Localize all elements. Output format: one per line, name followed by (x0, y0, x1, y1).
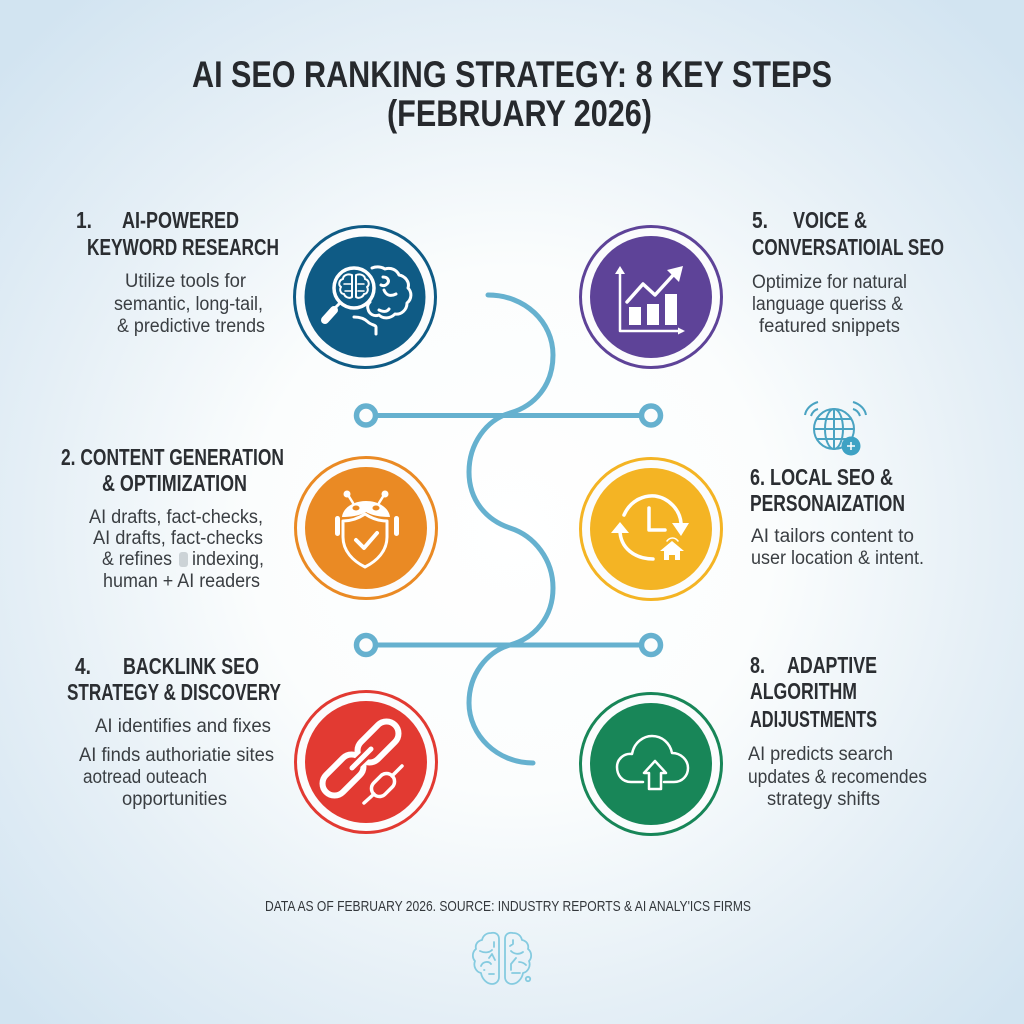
icon: footer brain (473, 933, 531, 984)
title (192, 54, 832, 134)
icon: rising bar chart (580, 226, 722, 368)
panel: step 4 text: AI identifies and fixes (95, 716, 271, 737)
panel: step 2 text: indexing, (192, 549, 264, 570)
panel: step 2 text: & refines (102, 549, 172, 570)
panel: step 2 text: 2. CONTENT GENERATION (61, 444, 284, 470)
panel: step 5 text: 5. (752, 207, 768, 233)
panel: step 8 text: ADAPTIVE (787, 652, 877, 678)
panel: step 5 text: language queriss & (752, 294, 903, 315)
panel: step 5 text (752, 207, 944, 337)
panel: step 1 text: & predictive trends (117, 316, 265, 337)
panel: step 2 text: AI drafts, fact-checks, (89, 507, 263, 528)
panel: step 5 text: Optimize for natural (752, 272, 907, 293)
title: AI SEO RANKING STRATEGY: 8 KEY STEPS (192, 54, 832, 95)
panel: step 4 text: aotread outeach (83, 767, 207, 788)
panel: step 1 text: semantic, long-tail, (114, 294, 263, 315)
panel: step 4 text: 4. (75, 653, 91, 679)
panel: step 6 text: PERSONAIZATION (750, 490, 905, 516)
panel: step 8 text: 8. (750, 652, 765, 678)
connector: winding line with nodes (356, 295, 660, 763)
panel: step 1 text: KEYWORD RESEARCH (87, 234, 279, 260)
panel: step 2 text: AI drafts, fact-checks (93, 528, 263, 549)
panel: step 5 text: featured snippets (759, 316, 900, 337)
icon: clock with cycle arrows (580, 458, 722, 600)
panel: step 2 text: & OPTIMIZATION (102, 470, 247, 496)
icon: brain under magnifier (294, 226, 436, 368)
panel: step 4 text: opportunities (122, 789, 227, 810)
panel: step 2 text: human + AI readers (103, 571, 260, 592)
panel: step 8 text: AI predicts search (748, 744, 893, 765)
panel: step 8 text: strategy shifts (767, 789, 880, 810)
panel: step 1 text (76, 207, 279, 337)
panel: step 4 text: STRATEGY & DISCOVERY (67, 679, 281, 705)
panel: step 1 text: Utilize tools for (125, 271, 247, 292)
panel: step 8 text: ADIJUSTMENTS (750, 706, 877, 732)
panel: step 6 text: AI tailors content to (751, 526, 914, 547)
icon: globe with signal (805, 402, 866, 456)
icon: broken chain links (296, 692, 436, 832)
panel: step 6 text: user location & intent. (751, 548, 924, 569)
panel: step 6 text (750, 464, 924, 569)
panel: step 8 text (748, 652, 927, 810)
icon: robot shield (296, 458, 436, 598)
panel: step 4 text (67, 653, 281, 810)
panel: step 6 text: 6. LOCAL SEO & (750, 464, 893, 490)
panel: step 1 text: 1. (76, 207, 92, 233)
panel: step 8 text: updates & recomendes (748, 767, 927, 788)
panel: step 1 text: AI-POWERED (122, 207, 239, 233)
panel: step 4 text: AI finds authoriatie sites (79, 745, 274, 766)
icon: cloud upload (580, 694, 722, 834)
panel: step 5 text: CONVERSATIOIAL SEO (752, 234, 944, 260)
panel: step 4 text: BACKLINK SEO (123, 653, 259, 679)
panel: step 5 text: VOICE & (793, 207, 867, 233)
panel: step 2 text (61, 444, 284, 592)
footer source note: DATA AS OF FEBRUARY 2026. SOURCE: INDUSTRY REPORTS & AI ANALY'ICS FIRMS (265, 898, 751, 915)
title: (FEBRUARY 2026) (387, 93, 652, 134)
panel: step 8 text: ALGORITHM (750, 678, 857, 704)
